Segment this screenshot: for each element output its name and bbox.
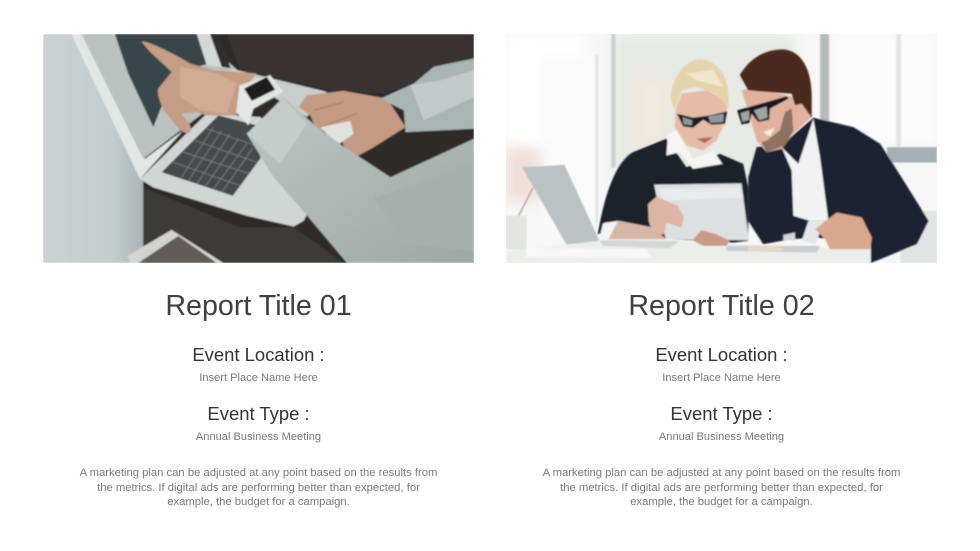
text: description: example, the budget for a campaign. bbox=[167, 496, 350, 508]
heading: event location: Event Location : bbox=[655, 344, 788, 365]
text: description: the metrics. If digital ads are performing better than expected, for bbox=[97, 482, 420, 494]
heading: event location: Event Location : bbox=[192, 344, 325, 365]
text: description: A marketing plan can be adjusted at any point based on the results from bbox=[80, 467, 437, 479]
text: place name: Insert Place Name Here bbox=[199, 372, 318, 384]
panel: report 02 bbox=[542, 290, 900, 508]
text: meeting type: Annual Business Meeting bbox=[659, 431, 784, 443]
text: place name: Insert Place Name Here bbox=[662, 372, 781, 384]
text: meeting type: Annual Business Meeting bbox=[196, 431, 321, 443]
photo: hands pointing at laptop bbox=[43, 34, 474, 263]
text: description: example, the budget for a campaign. bbox=[630, 496, 813, 508]
heading: event type: Event Type : bbox=[670, 403, 773, 424]
heading: event type: Event Type : bbox=[207, 403, 310, 424]
woman bbox=[598, 139, 748, 243]
text: description bbox=[542, 467, 900, 508]
photo: two colleagues with a tablet bbox=[506, 34, 937, 263]
heading: report title 02: Report Title 02 bbox=[628, 290, 815, 322]
heading: report title 01: Report Title 01 bbox=[165, 290, 352, 322]
text: description: the metrics. If digital ads are performing better than expected, for bbox=[560, 482, 883, 494]
text: description: A marketing plan can be adjusted at any point based on the results from bbox=[543, 467, 900, 479]
tablet and hands bbox=[654, 183, 749, 240]
text: description bbox=[80, 467, 437, 508]
man bbox=[748, 118, 929, 263]
panel: report 01 bbox=[80, 290, 437, 508]
